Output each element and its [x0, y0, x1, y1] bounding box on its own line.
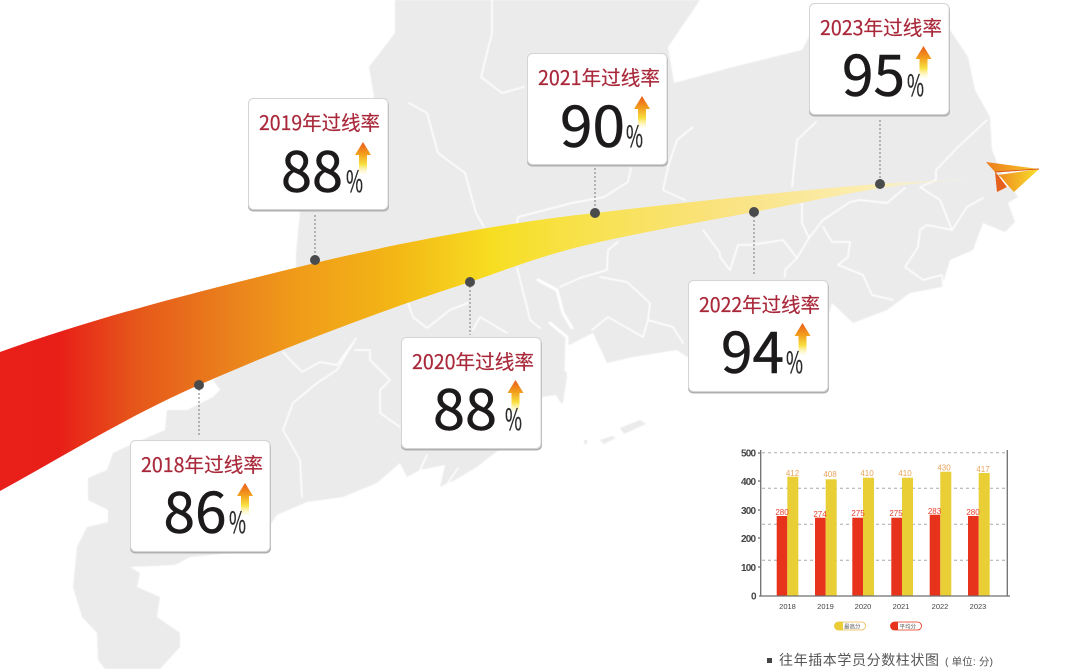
- card: 2022 pass rate: 94: [721, 309, 784, 390]
- card: 2023 pass rate: %: [907, 63, 924, 105]
- card: 2018 pass rate: 2018年过线率: [141, 449, 263, 478]
- bar chart: scores 2018-2023: 100: [741, 563, 756, 574]
- bar chart: scores 2018-2023: 2021: [893, 602, 909, 611]
- bars: 2022: 283: [928, 507, 942, 516]
- bar chart: scores 2018-2023: 0: [751, 592, 757, 602]
- bars: 2019: 274: [813, 510, 827, 519]
- connector and node: 2020: [465, 277, 475, 335]
- bar chart: scores 2018-2023: 200: [741, 534, 756, 545]
- bars: 2018: 412: [786, 469, 800, 478]
- bars: 2021: 410: [898, 469, 912, 478]
- gradient ribbon flight path: [0, 179, 985, 491]
- card: 2020 pass rate: [401, 338, 542, 450]
- card: 2018 pass rate: %: [229, 500, 246, 542]
- connector and node: 2019: [310, 215, 320, 265]
- chart caption: ( 单位: 分): [945, 655, 993, 668]
- bars: 2020: [851, 469, 874, 596]
- bars: 2018: 280: [775, 508, 789, 517]
- bars: 2018: [775, 469, 800, 596]
- card: 2020 pass rate: 88: [433, 366, 497, 447]
- bars: 2019: 408: [823, 470, 837, 479]
- bar chart: scores 2018-2023: 2020: [855, 602, 871, 611]
- card: 2021 pass rate: 90: [560, 83, 625, 164]
- card: 2023 pass rate: [809, 4, 950, 116]
- legend: highest score: 最高分: [844, 622, 861, 630]
- legend: average score: 平均分: [900, 622, 917, 630]
- bar chart: scores 2018-2023: 2023: [970, 602, 986, 611]
- legend: highest score: [834, 622, 866, 630]
- card: 2018 pass rate: 86: [164, 469, 226, 550]
- card: 2020 pass rate: 2020年过线率: [412, 346, 534, 375]
- card: 2019 pass rate: %: [346, 159, 363, 201]
- card: 2021 pass rate: 2021年过线率: [538, 62, 660, 91]
- card: 2018 pass rate: [130, 440, 271, 554]
- card: 2023 pass rate: 95: [842, 32, 905, 113]
- bars: 2019: [813, 470, 837, 596]
- bars: 2021: 275: [889, 509, 903, 518]
- card: 2022 pass rate: %: [786, 340, 803, 382]
- bar chart: scores 2018-2023: 300: [741, 506, 756, 517]
- card: 2023 pass rate: 2023年过线率: [820, 12, 942, 41]
- bars: 2022: 430: [937, 464, 951, 472]
- card: 2019 pass rate: 88: [281, 128, 343, 209]
- bars: 2021: [889, 469, 913, 596]
- card: 2019 pass rate: [248, 98, 389, 212]
- connector and node: 2023: [875, 120, 885, 189]
- card: 2020 pass rate: %: [505, 397, 522, 439]
- bar chart: scores 2018-2023: 2018: [779, 602, 796, 611]
- card: 2019 pass rate: 2019年过线率: [259, 107, 380, 136]
- bars: 2020: 410: [860, 469, 874, 478]
- connector and node: 2021: [590, 168, 600, 218]
- card: 2022 pass rate: [688, 280, 829, 394]
- bars: 2023: 417: [976, 465, 990, 474]
- card: 2021 pass rate: %: [626, 114, 643, 156]
- bars: 2020: 275: [851, 509, 865, 518]
- bar chart: scores 2018-2023: 2022: [932, 602, 948, 611]
- legend: average score: [890, 622, 922, 630]
- chart caption: 往年插本学员分数柱状图: [779, 652, 939, 668]
- icon: paper plane: [986, 162, 1039, 192]
- card: 2021 pass rate: [527, 54, 668, 166]
- bars: 2022: [928, 464, 951, 596]
- bars: 2023: 280: [966, 508, 980, 517]
- connector and node: 2022: [749, 207, 759, 275]
- connector and node: 2018: [194, 380, 204, 436]
- bar chart: scores 2018-2023: 500: [741, 448, 756, 460]
- bars: 2023: [966, 465, 990, 596]
- bar chart: scores 2018-2023: [735, 445, 1015, 615]
- bar chart: scores 2018-2023: 2019: [817, 602, 834, 611]
- bar chart: scores 2018-2023: 400: [741, 477, 756, 488]
- card: 2022 pass rate: 2022年过线率: [699, 289, 820, 318]
